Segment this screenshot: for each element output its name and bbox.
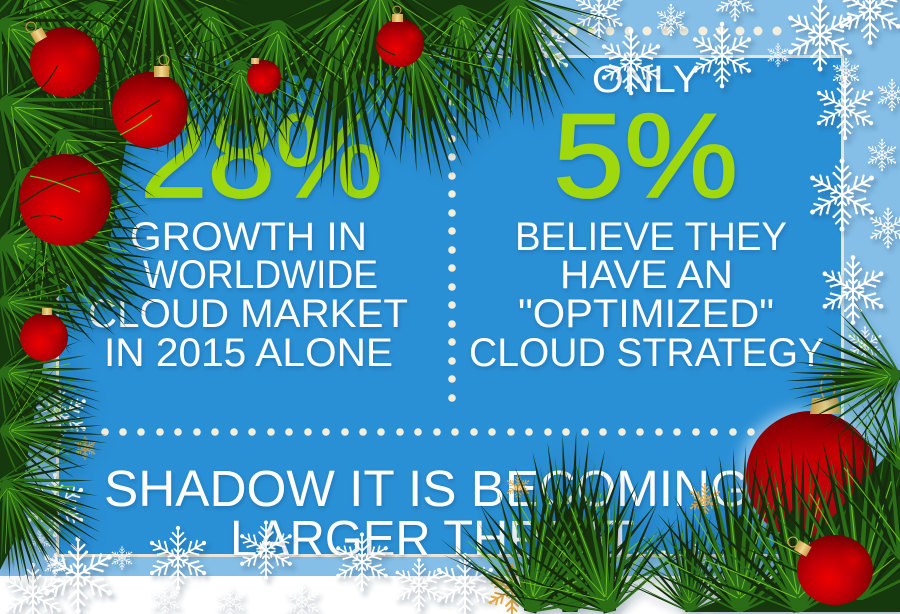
- heading: shadow IT: [104, 460, 750, 567]
- statistic: only 5%: [469, 59, 824, 375]
- snowflakes: top right: [508, 0, 900, 364]
- statistic: only 5%: CLOUD STRATEGY: [469, 331, 824, 375]
- ornament: small red bauble lower right: [788, 535, 873, 605]
- ornament: small red bauble 4: [247, 58, 281, 94]
- pine branches: bottom centre: [427, 431, 765, 614]
- statistic: only 5%: BELIEVE THEY: [515, 215, 787, 259]
- snowflakes: bottom: [1, 386, 711, 614]
- statistic: 28% growth: IN 2015 ALONE: [104, 331, 393, 375]
- pine branches: bottom right: [623, 295, 900, 614]
- top dotted line: [532, 26, 782, 36]
- statistic: 28% growth: [88, 89, 408, 375]
- ornament: red bauble behind branches: [227, 0, 286, 43]
- ornament: red bauble 1: [26, 22, 100, 97]
- statistic: only 5%: 5%: [553, 89, 738, 223]
- ornament: red bauble 3: [19, 154, 111, 246]
- statistic: 28% growth: WORLDWIDE: [143, 253, 378, 297]
- panel: blue board: [58, 56, 842, 556]
- statistic: only 5%: HAVE AN: [560, 253, 733, 297]
- background: white snow strip: [0, 576, 900, 614]
- statistic: only 5%: ONLY: [592, 59, 700, 101]
- ornament: red bauble 2: [112, 55, 188, 148]
- snowflakes: gold: [73, 436, 722, 614]
- ornament: red bauble 5: [376, 6, 424, 67]
- statistic: only 5%: "OPTIMIZED": [518, 292, 774, 336]
- vertical dotted divider: [448, 98, 456, 402]
- heading: shadow IT: SHADOW IT IS BECOMING: [104, 460, 750, 517]
- statistic: 28% growth: CLOUD MARKET: [88, 292, 408, 336]
- statistic: 28% growth: 28%: [140, 89, 383, 223]
- ornament: red bauble 7: [20, 308, 68, 361]
- horizontal dotted divider: [101, 428, 755, 436]
- pine branches: top and left: [0, 0, 634, 607]
- statistic: 28% growth: GROWTH IN: [130, 215, 367, 259]
- ornament: large red bauble: [738, 374, 876, 544]
- needles over baubles: [20, 40, 395, 220]
